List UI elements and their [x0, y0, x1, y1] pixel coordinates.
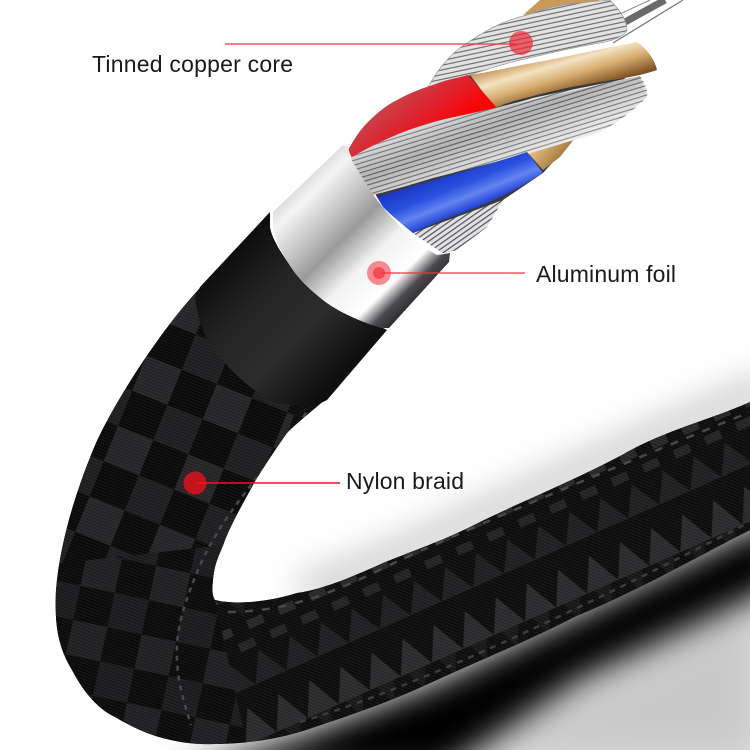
callout: nylon braid [184, 468, 464, 494]
label: tinned copper core: Tinned copper core [92, 51, 293, 77]
lower gold conductor [527, 138, 575, 170]
upper gold conductor [470, 42, 657, 108]
marker dot: aluminum foil [367, 261, 391, 285]
blue insulated wire [377, 152, 543, 233]
cable shadow on the ground [170, 385, 750, 750]
lower tinned strands [413, 200, 503, 253]
nylon braided cable body [56, 288, 750, 744]
black heat-shrink sleeve [195, 212, 387, 406]
label: aluminum foil: Aluminum foil [536, 261, 676, 287]
leader line: tinned copper core [225, 43, 516, 45]
leader line: nylon braid [197, 482, 340, 484]
tinned strands behind and thin wires [428, 0, 683, 87]
middle tinned strand bundle [350, 76, 647, 195]
aluminum foil shield [273, 145, 450, 328]
marker dot: tinned copper core [509, 31, 533, 55]
dark wire core behind the conductors [350, 60, 647, 253]
callout: aluminum foil [367, 261, 676, 287]
callout: tinned copper core [92, 31, 533, 77]
label: nylon braid: Nylon braid [346, 468, 464, 494]
leader line: aluminum foil [381, 272, 525, 274]
red insulated wire [348, 75, 497, 158]
marker dot: nylon braid [184, 472, 206, 494]
